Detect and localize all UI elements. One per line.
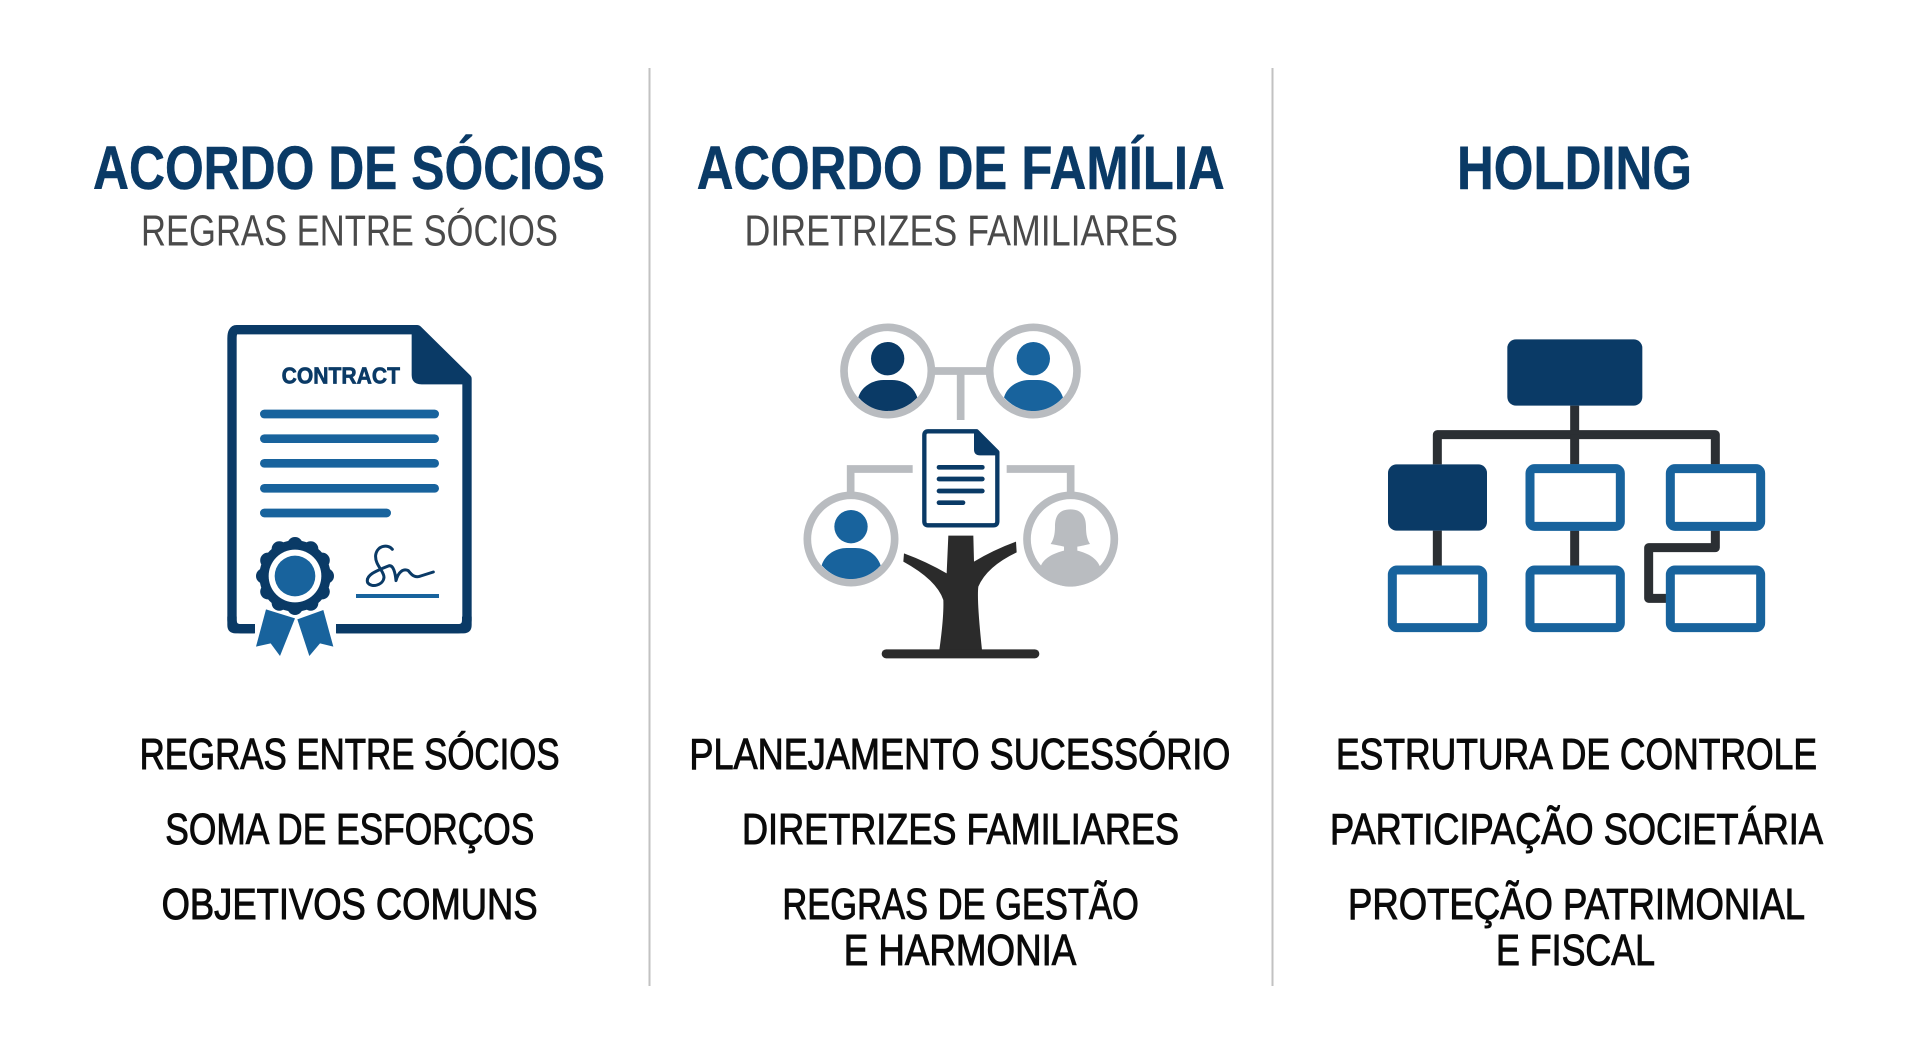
list: soma de esforços: SOMA DE ESFORÇOS — [165, 805, 534, 854]
panel: acordo de família — [689, 134, 1230, 975]
list: objetivos comuns: OBJETIVOS COMUNS — [162, 880, 538, 929]
list: participação societária: PARTICIPAÇÃO SOCIETÁRIA — [1330, 804, 1824, 854]
panel: holding — [1330, 134, 1824, 975]
subheading: regras entre sócios: REGRAS ENTRE SÓCIOS — [141, 206, 558, 256]
list: e harmonia: E HARMONIA — [844, 926, 1077, 975]
subheading: diretrizes familiares: DIRETRIZES FAMILIARES — [744, 206, 1178, 256]
panel: acordo de sócios — [93, 134, 605, 929]
list: e fiscal: E FISCAL — [1496, 926, 1655, 975]
list: proteção patrimonial: PROTEÇÃO PATRIMONIAL — [1348, 879, 1805, 929]
heading: holding: HOLDING — [1457, 134, 1692, 202]
list: regras entre sócios: REGRAS ENTRE SÓCIOS — [140, 730, 560, 779]
icon: contract with seal and signature: CONTRACT — [282, 362, 400, 388]
list: regras de gestão: REGRAS DE GESTÃO — [782, 879, 1139, 929]
icon: family tree with document — [807, 327, 1114, 658]
list: estrutura de controle: ESTRUTURA DE CONTROLE — [1336, 730, 1817, 779]
heading: acordo de sócios: ACORDO DE SÓCIOS — [93, 134, 605, 202]
icon: contract with seal and signature — [227, 330, 472, 656]
list: diretrizes familiares: DIRETRIZES FAMILIARES — [742, 805, 1179, 854]
list: planejamento sucessório: PLANEJAMENTO SUCESSÓRIO — [689, 730, 1230, 779]
heading: acordo de família: ACORDO DE FAMÍLIA — [697, 134, 1225, 202]
icon: organization chart — [1388, 339, 1761, 628]
